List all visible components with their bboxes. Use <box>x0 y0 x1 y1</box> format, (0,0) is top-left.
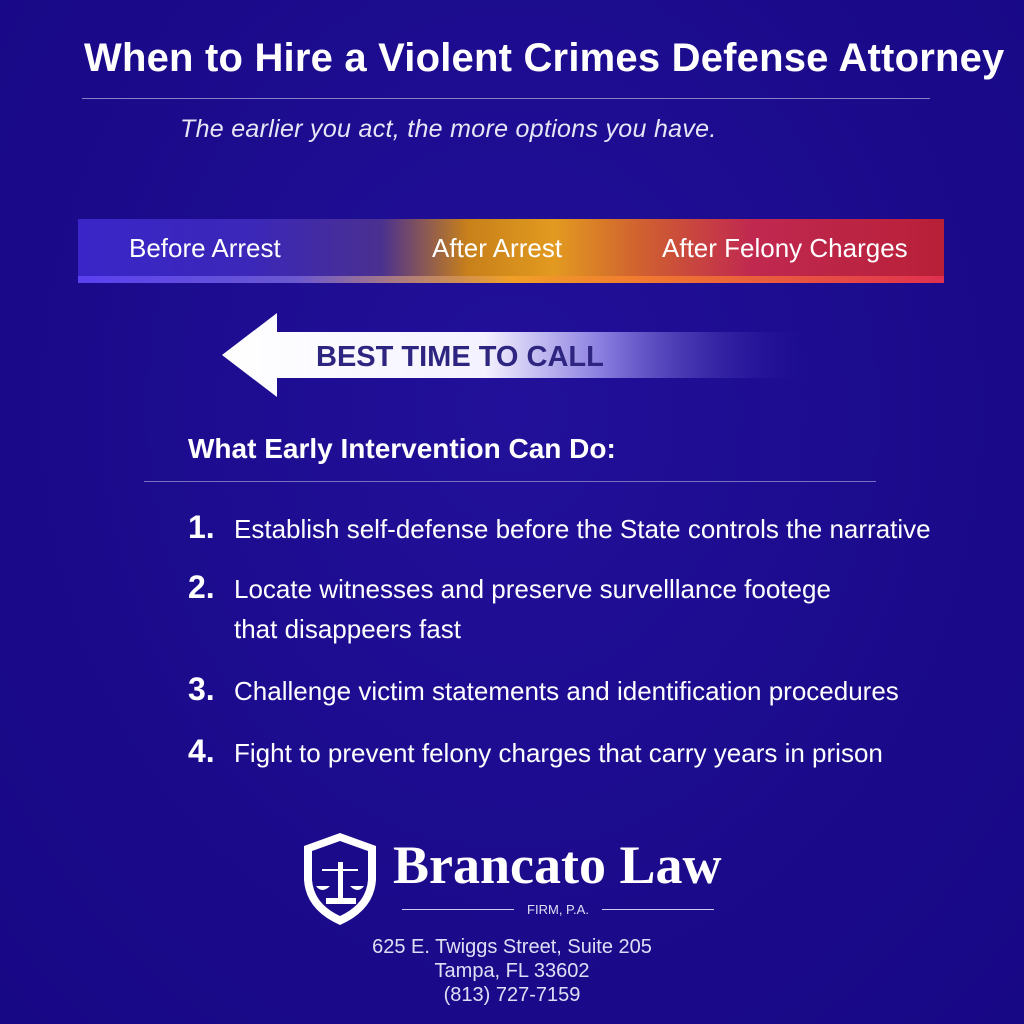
address <box>372 936 652 1006</box>
title: When to Hire a Violent Crimes Defense Attorney <box>84 36 1005 80</box>
address: (813) 727-7159 <box>444 984 580 1006</box>
item 3: 3. <box>188 671 215 707</box>
address: Tampa, FL 33602 <box>435 960 589 982</box>
item 4: 4. <box>188 733 215 769</box>
item 2: that disappeers fast <box>234 614 461 644</box>
section heading: What Early Intervention Can Do: <box>188 433 616 464</box>
tagline: FIRM, P.A. <box>527 902 589 917</box>
item 1: Establish self-defense before the State controls the narrative <box>234 514 931 544</box>
logo <box>304 833 722 925</box>
address: 625 E. Twiggs Street, Suite 205 <box>372 936 652 958</box>
item 2: Locate witnesses and preserve survelllance footege <box>234 574 831 604</box>
arrow: best time to call: BEST TIME TO CALL <box>316 341 604 373</box>
item 2: 2. <box>188 569 215 605</box>
item 3: Challenge victim statements and identification procedures <box>234 676 899 706</box>
item 4: Fight to prevent felony charges that carry years in prison <box>234 738 883 768</box>
timeline bar <box>78 219 944 283</box>
subtitle: The earlier you act, the more options you have. <box>180 115 717 143</box>
label: after arrest: After Arrest <box>432 233 562 263</box>
item 2 <box>188 569 831 644</box>
label: after felony charges: After Felony Charges <box>662 233 908 263</box>
list <box>188 509 931 769</box>
firm name: Brancato Law <box>393 835 721 895</box>
label: before arrest: Before Arrest <box>129 233 281 263</box>
arrow: best time to call <box>222 313 757 397</box>
icon: shield with scales <box>304 833 376 925</box>
item 1: 1. <box>188 509 215 545</box>
